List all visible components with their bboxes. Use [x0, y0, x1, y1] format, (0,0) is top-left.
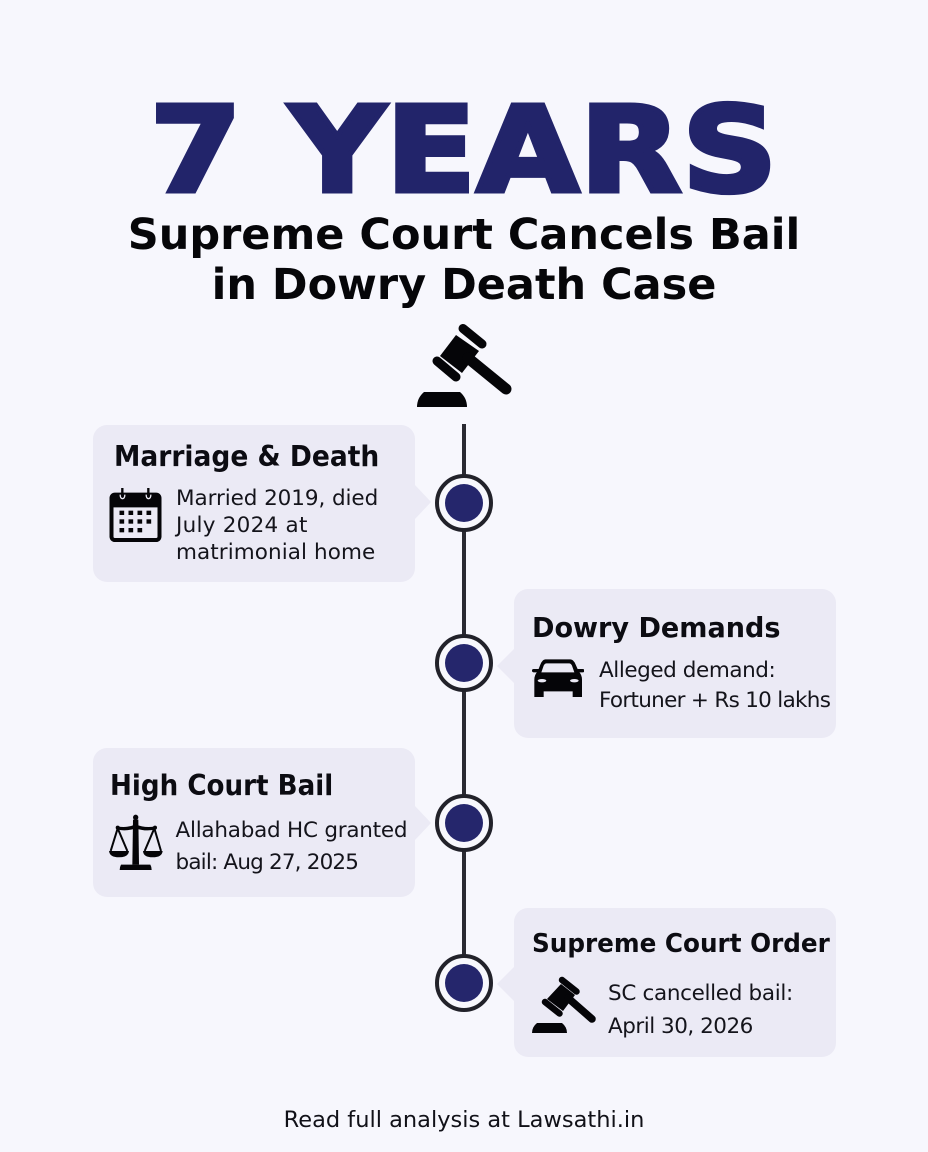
body text: SC cancelled bail: — [608, 981, 793, 1006]
pointer — [497, 649, 514, 683]
body text: Fortuner + Rs 10 lakhs — [599, 688, 830, 713]
footer: Read full analysis at Lawsathi.in — [284, 1107, 644, 1133]
heading: Supreme Court Order — [532, 929, 830, 959]
panel: marriage and death — [93, 425, 415, 582]
subtitle: Supreme Court Cancels Bail — [128, 210, 800, 260]
subtitle: in Dowry Death Case — [212, 260, 716, 310]
timeline line — [462, 424, 466, 984]
body text: Allahabad HC granted — [176, 818, 407, 843]
body text — [599, 658, 830, 713]
pointer — [415, 485, 431, 519]
body text — [176, 818, 407, 875]
panel: high court bail — [93, 748, 415, 897]
icon: scales — [109, 814, 163, 870]
panel: dowry demands — [514, 589, 836, 738]
body text: April 30, 2026 — [608, 1014, 753, 1039]
icon: calendar — [110, 488, 162, 542]
pointer — [415, 806, 431, 840]
timeline node 3 — [435, 794, 493, 852]
heading: Marriage & Death — [114, 440, 379, 473]
heading: Dowry Demands — [532, 612, 780, 644]
body text — [608, 981, 793, 1039]
heading: High Court Bail — [110, 769, 333, 802]
body text: July 2024 at — [176, 513, 308, 538]
body text — [174, 486, 378, 565]
body text: Alleged demand: — [599, 658, 775, 683]
body text: matrimonial home — [176, 540, 375, 565]
pointer — [497, 967, 514, 1001]
main title: 7 YEARS — [150, 81, 778, 219]
icon: car — [532, 659, 584, 697]
subtitle — [128, 210, 800, 310]
icon: gavel small — [532, 976, 596, 1033]
icon: gavel top — [417, 324, 512, 407]
body text: Married 2019, died — [176, 486, 378, 511]
timeline node 4 — [435, 954, 493, 1012]
body text: bail: Aug 27, 2025 — [176, 850, 358, 875]
panel: supreme court order — [514, 908, 836, 1057]
timeline node 1 — [435, 474, 493, 532]
timeline node 2 — [435, 634, 493, 692]
